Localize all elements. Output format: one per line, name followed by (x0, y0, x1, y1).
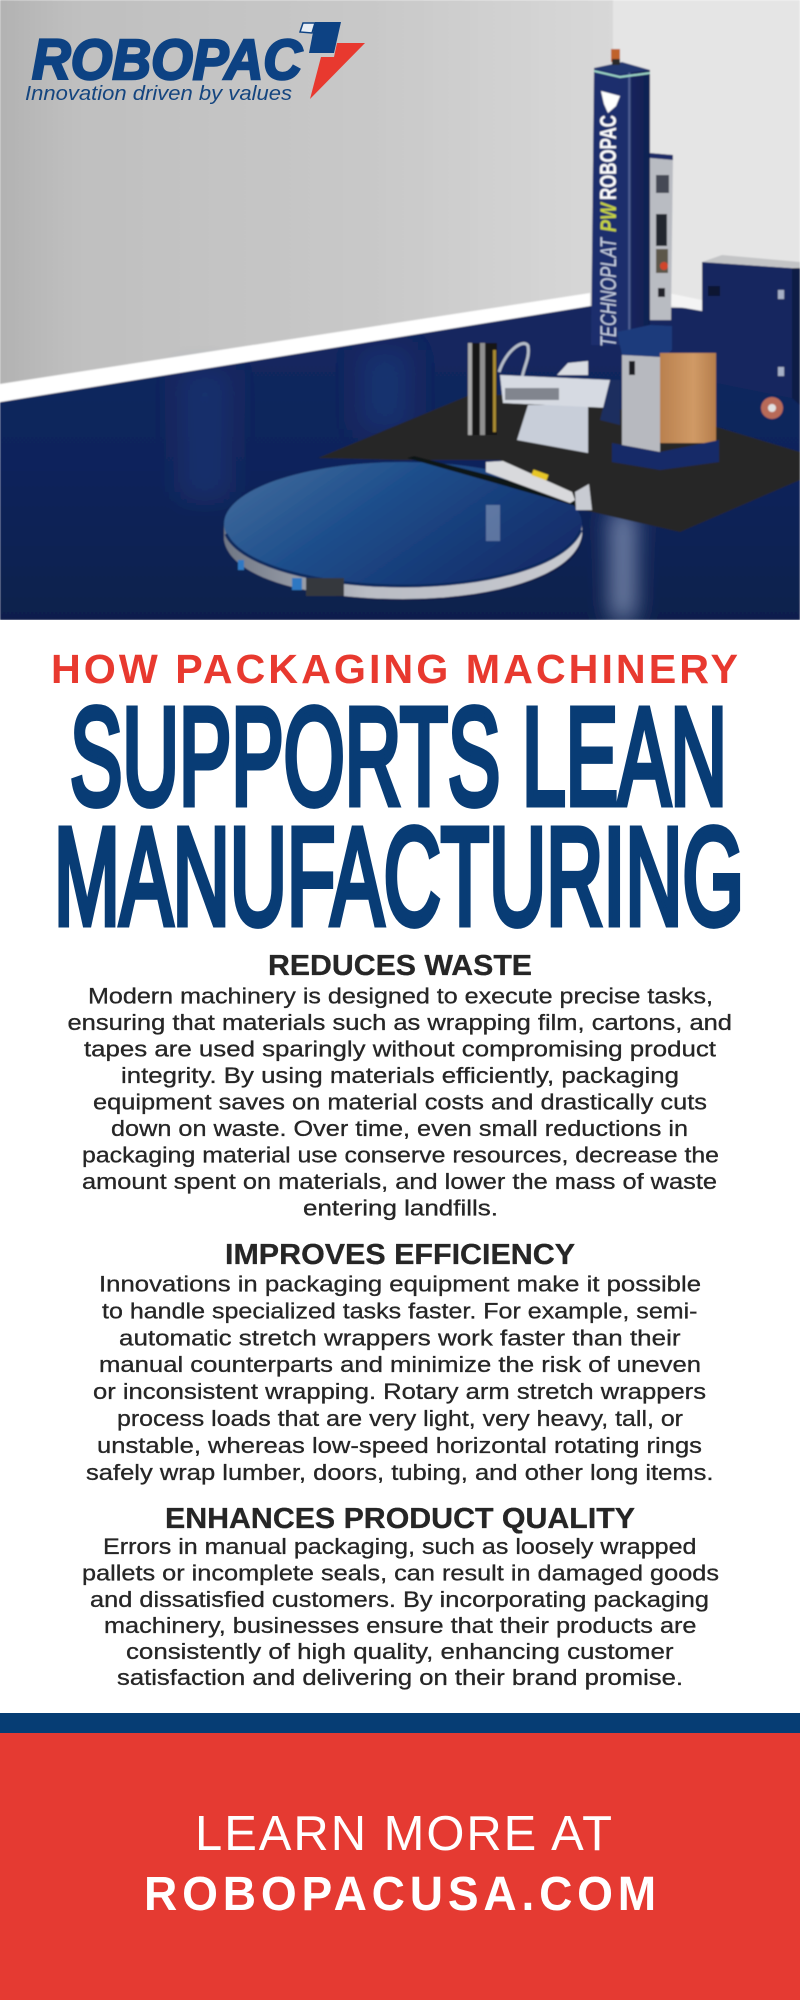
film tube (499, 344, 528, 378)
logo (25, 22, 365, 105)
section: enhances product quality: satisfaction and delivering on their brand promise. (117, 1665, 683, 1690)
vertical roller (468, 343, 497, 435)
carriage with film roll (612, 325, 719, 470)
section: reduces waste: entering landfills. (303, 1196, 498, 1221)
section: reduces waste (68, 950, 732, 1221)
title kicker: HOW PACKAGING MACHINERY (51, 646, 741, 692)
section: enhances product quality: machinery, businesses ensure that their products are (104, 1613, 696, 1638)
section: reduces waste: ensuring that materials such as wrapping film, cartons, and (68, 1010, 732, 1035)
column lettering: PW (596, 201, 621, 232)
back wall (0, 0, 800, 400)
heading: improves efficiency: IMPROVES EFFICIENCY (225, 1239, 575, 1271)
column lettering: ROBOPAC (595, 115, 621, 200)
heading: reduces waste: REDUCES WASTE (268, 950, 532, 982)
floor (0, 306, 800, 620)
logo: ROBOPAC (32, 28, 303, 92)
control panel (648, 153, 673, 320)
footer line 2: ROBOPACUSA.COM (144, 1868, 661, 1921)
footer line 1: LEARN MORE AT (195, 1807, 614, 1861)
section: reduces waste: equipment saves on material costs and drastically cuts (93, 1090, 707, 1115)
section: reduces waste: tapes are used sparingly without compromising product (84, 1036, 716, 1061)
section: improves efficiency: unstable, whereas low-speed horizontal rotating rings (97, 1433, 702, 1458)
section: improves efficiency: manual counterparts and minimize the risk of uneven (99, 1352, 701, 1377)
section: improves efficiency: Innovations in packaging equipment make it possible (99, 1272, 701, 1297)
column lettering (595, 115, 621, 347)
column lettering: TECHNOPLAT (596, 237, 621, 347)
footer call to action (0, 1733, 800, 2000)
turntable (224, 462, 582, 601)
section: improves efficiency: process loads that are very light, very heavy, tall, or (117, 1406, 683, 1431)
section: enhances product quality: Errors in manual packaging, such as loosely wrapped (103, 1534, 696, 1559)
rubber mat (318, 395, 800, 532)
section: enhances product quality: and dissatisfied customers. By incorporating packaging (90, 1587, 709, 1612)
machine column (591, 49, 650, 347)
control cabinet (702, 255, 800, 419)
section: reduces waste: amount spent on materials, and lower the mass of waste (82, 1169, 717, 1194)
section: reduces waste: Modern machinery is designed to execute precise tasks, (88, 983, 713, 1008)
section: reduces waste: down on waste. Over time, even small reductions in (111, 1116, 688, 1141)
section: reduces waste: packaging material use conserve resources, decrease the (82, 1142, 719, 1168)
section: improves efficiency: to handle specialized tasks faster. For example, semi- (102, 1298, 698, 1324)
section: improves efficiency: safely wrap lumber, doors, tubing, and other long items. (86, 1460, 714, 1485)
section: reduces waste: integrity. By using materials efficiently, packaging (121, 1063, 679, 1088)
section: improves efficiency: automatic stretch wrappers work faster than their (119, 1325, 680, 1350)
hero photo: stretch wrapping machine (0, 0, 800, 620)
section: improves efficiency (86, 1239, 714, 1485)
rotary arm and post (500, 361, 620, 453)
heading: enhances product quality: ENHANCES PRODUCT QUALITY (165, 1503, 635, 1535)
title (51, 646, 744, 940)
section: improves efficiency: or inconsistent wrapping. Rotary arm stretch wrappers (93, 1379, 706, 1404)
section: enhances product quality: pallets or incomplete seals, can result in damaged goods (82, 1560, 719, 1586)
conveyor guide on turntable (407, 456, 592, 510)
logo: Innovation driven by values (25, 83, 292, 105)
section: enhances product quality: consistently of high quality, enhancing customer (126, 1639, 674, 1664)
section: enhances product quality (82, 1503, 719, 1690)
navy divider band (0, 1713, 800, 1733)
baseboard (0, 293, 702, 402)
